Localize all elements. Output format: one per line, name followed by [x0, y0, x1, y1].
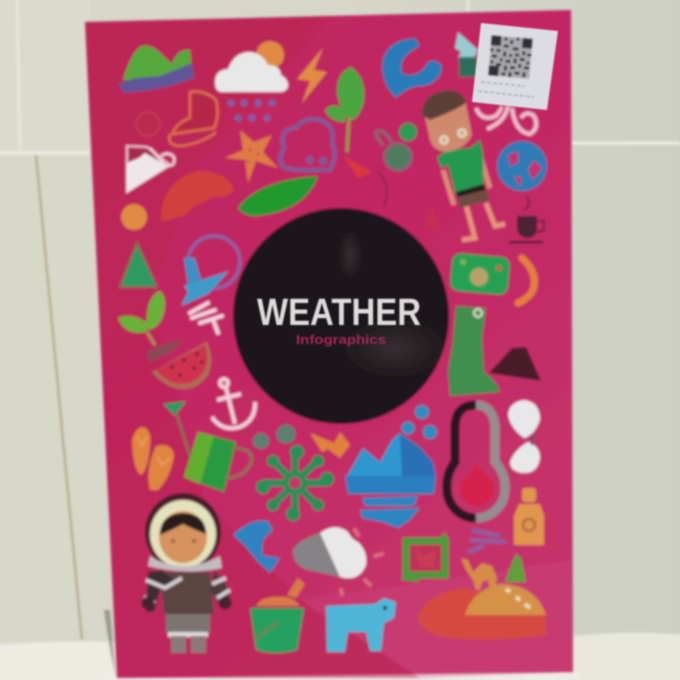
- icon: small gears: [253, 424, 296, 449]
- icon: raindrops: [228, 100, 276, 122]
- icon: camel: [461, 558, 497, 590]
- icon: green desert tree: [505, 554, 526, 582]
- sticker with QR code: [472, 23, 558, 110]
- icon: white anchor: [212, 379, 255, 428]
- child face: [159, 511, 207, 563]
- book cover: [85, 10, 573, 678]
- icon: pine tree: [455, 32, 478, 77]
- icon: iceberg: [345, 433, 436, 528]
- icon: purple wind lines: [468, 530, 506, 552]
- child boots: [171, 636, 186, 653]
- parka body: [160, 572, 214, 614]
- title: WEATHER: WEATHER: [257, 292, 421, 334]
- icon: pink rays: [341, 530, 382, 594]
- icon: green snowflake: [256, 445, 334, 521]
- icon: green camera: [449, 253, 511, 295]
- icon: ice skate: [169, 92, 218, 146]
- icon: plant: [325, 67, 387, 207]
- icon: red leaf marker: [424, 205, 440, 232]
- icon: black title disc: [233, 208, 449, 424]
- icon: earth globe: [497, 141, 547, 191]
- darker cover shading: [85, 16, 420, 678]
- icon: small lightning: [310, 432, 350, 458]
- icon: lightning bolt: [297, 48, 327, 103]
- sticker paper: [472, 23, 558, 110]
- icon: green mountains: [118, 46, 194, 93]
- icon: sunglasses: [508, 400, 540, 473]
- icon: green flower outline: [376, 123, 417, 170]
- QR code: [488, 35, 533, 79]
- lighter cover stripe: [300, 560, 573, 678]
- icon: desert island: [418, 584, 546, 639]
- child mittens: [142, 596, 154, 610]
- icon: gauge and blue wind: [181, 236, 240, 306]
- icon: white swirl: [476, 106, 536, 134]
- icon: blue wave: [382, 38, 442, 98]
- boy legs: [462, 203, 505, 240]
- icon: sunscreen bottle: [514, 488, 544, 545]
- boy body: [437, 140, 484, 196]
- icon: green leaf frame: [400, 532, 450, 582]
- boy hair: [422, 90, 466, 120]
- icon: thermometer: [447, 405, 505, 518]
- icon: green sprout: [118, 291, 165, 345]
- icon: orange sun: [121, 204, 147, 230]
- parka collar: [148, 556, 222, 572]
- icon: purple cloud outline: [280, 119, 335, 170]
- character: boy: [422, 90, 505, 240]
- icon: flip flops: [132, 427, 174, 490]
- icon: watering can: [163, 401, 252, 492]
- boy eyes: [439, 135, 449, 145]
- white ledge at bottom of wall: [0, 610, 680, 680]
- icon: blue dolphin: [233, 521, 280, 573]
- character: child in parka: [142, 493, 232, 653]
- boy shorts: [456, 184, 490, 208]
- icon: coffee cup: [509, 197, 544, 244]
- subtitle: Infographics: Infographics: [296, 332, 386, 347]
- icon: orange sausage: [518, 258, 534, 303]
- icon: sun behind cloud: [215, 41, 288, 92]
- parka hood: [145, 493, 221, 571]
- icon: white snowy mountain: [127, 146, 174, 192]
- icon: brown lid: [146, 341, 183, 362]
- icon: white tornado: [190, 303, 222, 333]
- icon: green leaf: [238, 176, 318, 216]
- icon: polar bear: [326, 598, 396, 652]
- icon: orange star: [225, 130, 278, 183]
- icon: red umbrella: [161, 171, 234, 222]
- sticker small print: [478, 82, 534, 97]
- icon: blue dots: [402, 405, 437, 439]
- child trousers: [166, 614, 210, 633]
- child hair: [160, 513, 206, 535]
- cover base: [85, 10, 573, 678]
- icon: boot: [448, 306, 500, 396]
- icon: watermelon: [152, 342, 211, 389]
- icon: dark volcano: [489, 347, 541, 381]
- icon: green sailboat: [120, 243, 157, 287]
- boy arms: [443, 155, 490, 205]
- boy head: [424, 100, 472, 152]
- icon: grey and white cloud: [293, 527, 366, 578]
- icon: green bucket: [250, 578, 305, 653]
- icon: faint circle: [136, 112, 160, 136]
